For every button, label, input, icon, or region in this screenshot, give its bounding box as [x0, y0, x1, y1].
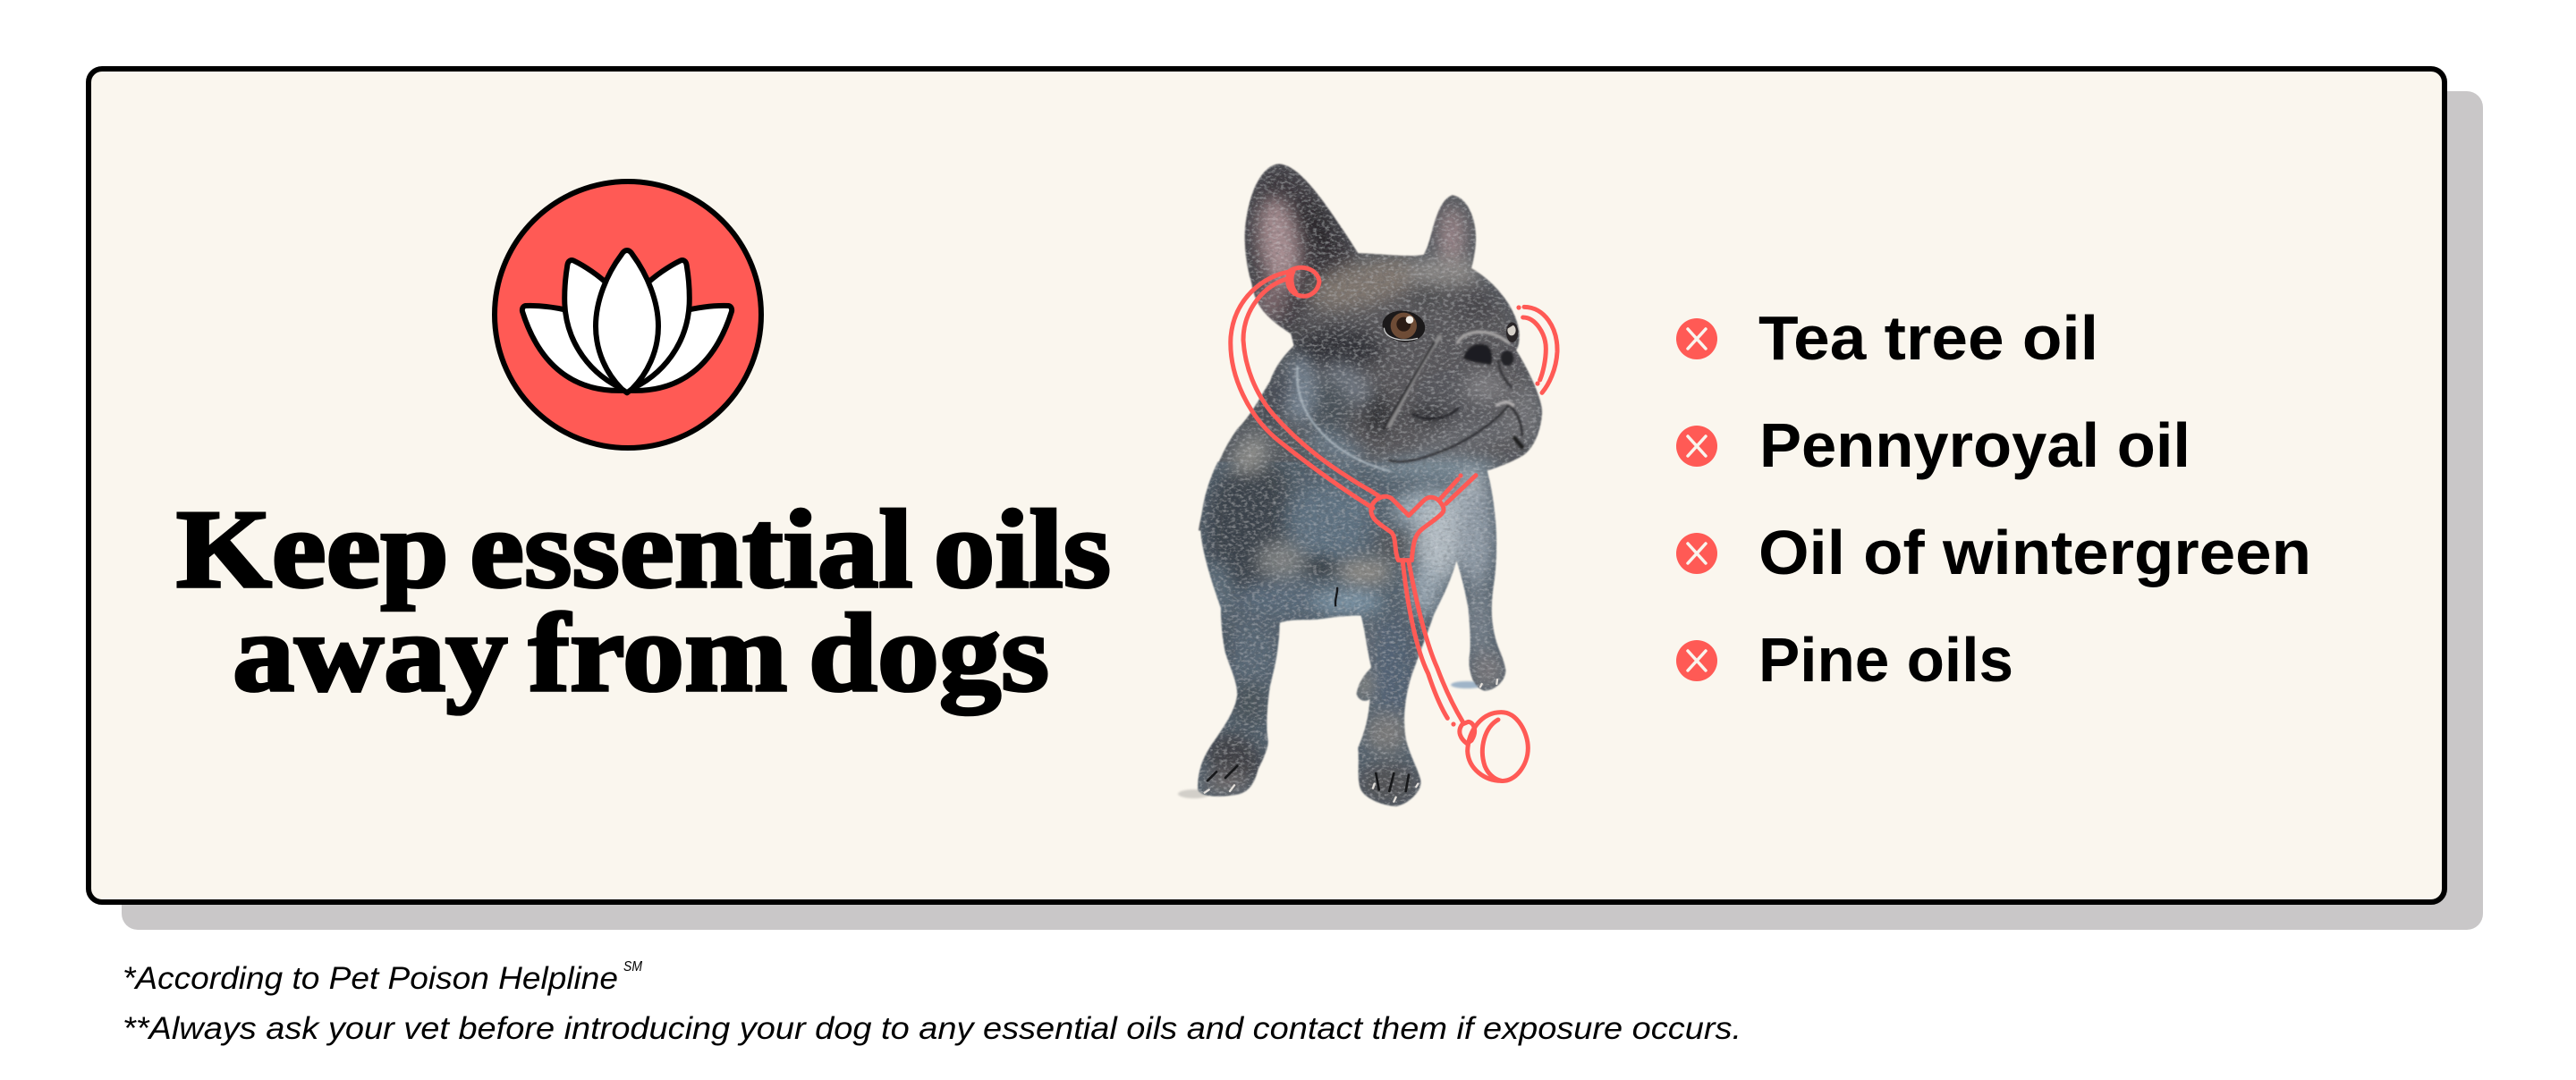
fine dog details [1297, 332, 1522, 471]
dog floor shadows [1178, 681, 1483, 798]
title: away from dogs [233, 592, 1049, 715]
footnotes [123, 959, 1741, 1046]
main card panel [89, 69, 2445, 902]
stethoscope [1231, 267, 1557, 780]
list item: pine oils: Pine oils [1758, 625, 2013, 695]
dog eyes and chest crease [1205, 308, 1518, 802]
list item: tea tree oil: Tea tree oil [1758, 303, 2098, 373]
footnotes: **Always ask your vet before introducing your dog to any essential oils and contact them if exposure occurs. [123, 1011, 1741, 1046]
footnotes: SM [623, 959, 643, 975]
illustration: french bulldog with stethoscope [1178, 164, 1557, 806]
title [176, 488, 1111, 715]
list of toxic oils [1676, 303, 2311, 695]
footnotes: *According to Pet Poison Helpline [123, 961, 618, 996]
card drop shadow [122, 91, 2483, 930]
list item: oil of wintergreen: Oil of wintergreen [1758, 518, 2311, 587]
title: Keep essential oils [176, 488, 1111, 612]
icon: lotus in coral circle [495, 181, 761, 448]
nose [1464, 344, 1491, 364]
dog photo [1196, 164, 1542, 806]
list item: pennyroyal oil: Pennyroyal oil [1759, 410, 2190, 480]
